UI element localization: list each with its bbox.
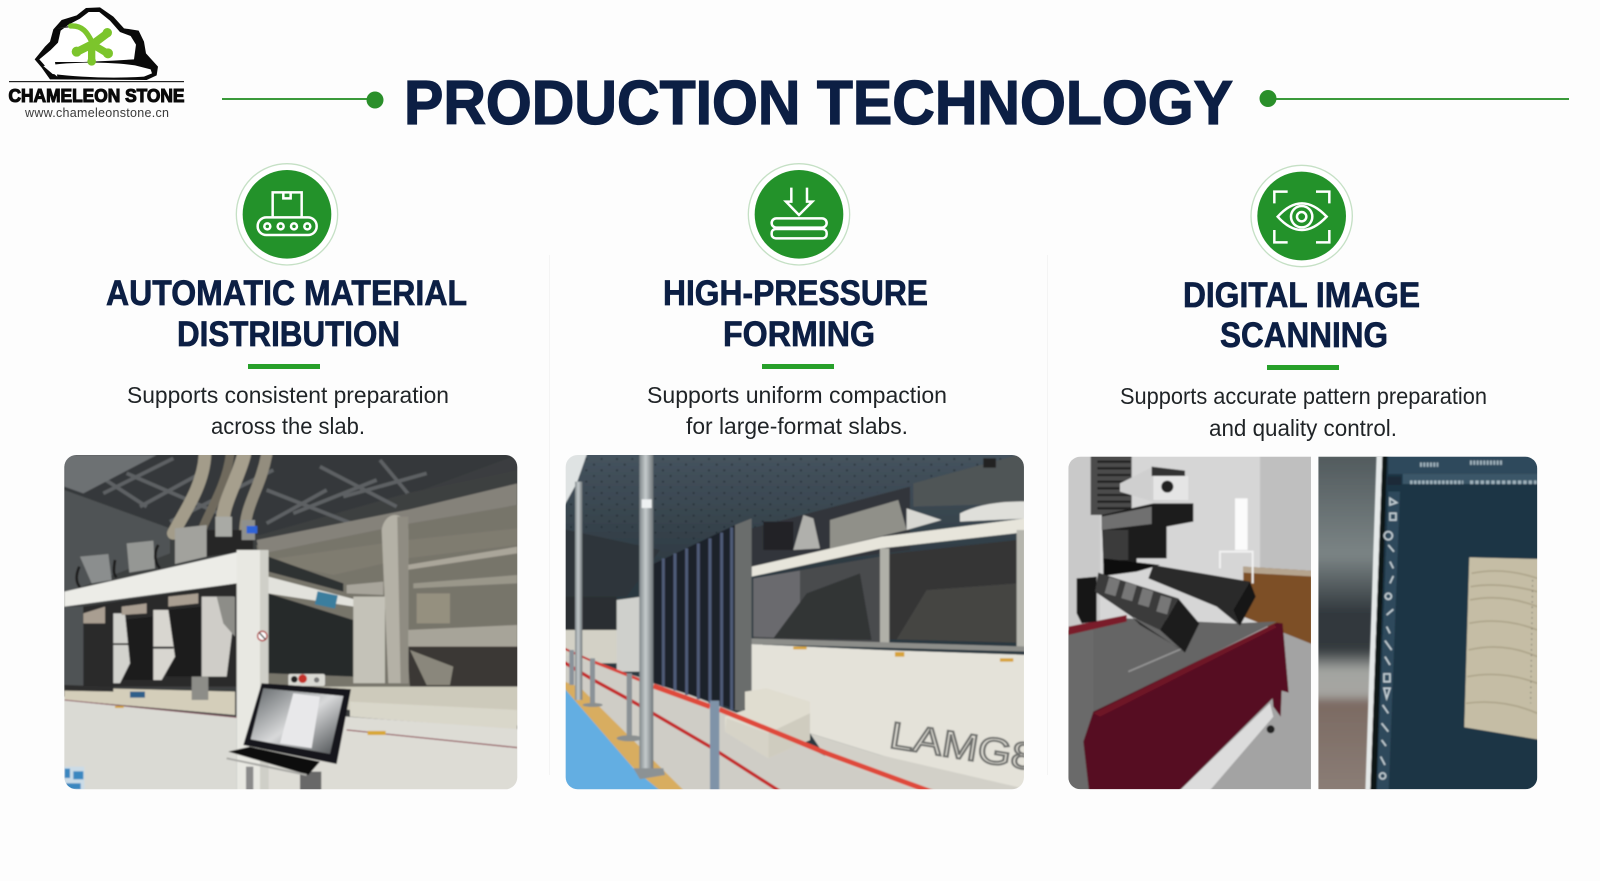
logo: Chameleon Stone: CHAMELEON STONE bbox=[8, 85, 184, 106]
accent bar bbox=[1267, 365, 1339, 370]
photo: flatbed scanner bbox=[1068, 456, 1311, 790]
heading: HIGH-PRESSURE bbox=[663, 273, 928, 313]
photo: material distribution machine bbox=[60, 450, 530, 800]
description: Supports uniform compaction bbox=[647, 382, 947, 408]
title connector right bbox=[1260, 90, 1569, 107]
logo: Chameleon Stone bbox=[8, 7, 184, 120]
description bbox=[1120, 383, 1487, 441]
panel: high-pressure forming bbox=[560, 164, 1038, 800]
description bbox=[127, 382, 449, 439]
heading bbox=[106, 273, 467, 354]
icon: scanning eye bbox=[1251, 165, 1352, 267]
description bbox=[647, 382, 947, 439]
logo: Chameleon Stone: www.chameleonstone.cn bbox=[24, 106, 169, 120]
panel: digital image scanning bbox=[1060, 165, 1553, 800]
description: for large-format slabs. bbox=[686, 413, 908, 439]
panel: automatic material distribution bbox=[60, 164, 530, 800]
heading bbox=[663, 273, 928, 354]
frog mark bbox=[71, 26, 111, 63]
accent bar bbox=[762, 364, 834, 369]
title connector left bbox=[222, 92, 384, 108]
title: PRODUCTION TECHNOLOGY bbox=[404, 69, 1233, 138]
heading: DISTRIBUTION bbox=[177, 314, 400, 354]
heading: FORMING bbox=[723, 314, 875, 354]
heading: DIGITAL IMAGE bbox=[1183, 275, 1420, 315]
icon: conveyor bbox=[236, 164, 338, 265]
icon: press bbox=[748, 164, 850, 265]
description: and quality control. bbox=[1209, 415, 1397, 441]
logo rock bbox=[35, 7, 158, 80]
accent bar bbox=[248, 364, 320, 369]
heading bbox=[1183, 275, 1420, 355]
heading: SCANNING bbox=[1220, 315, 1388, 355]
description: across the slab. bbox=[211, 413, 365, 439]
photo: design software screen bbox=[1318, 456, 1538, 790]
heading: AUTOMATIC MATERIAL bbox=[106, 273, 467, 313]
description: Supports accurate pattern preparation bbox=[1120, 383, 1487, 409]
photo: press line: LAMG8 bbox=[887, 714, 1038, 778]
photo: press line bbox=[560, 450, 1038, 800]
description: Supports consistent preparation bbox=[127, 382, 449, 408]
